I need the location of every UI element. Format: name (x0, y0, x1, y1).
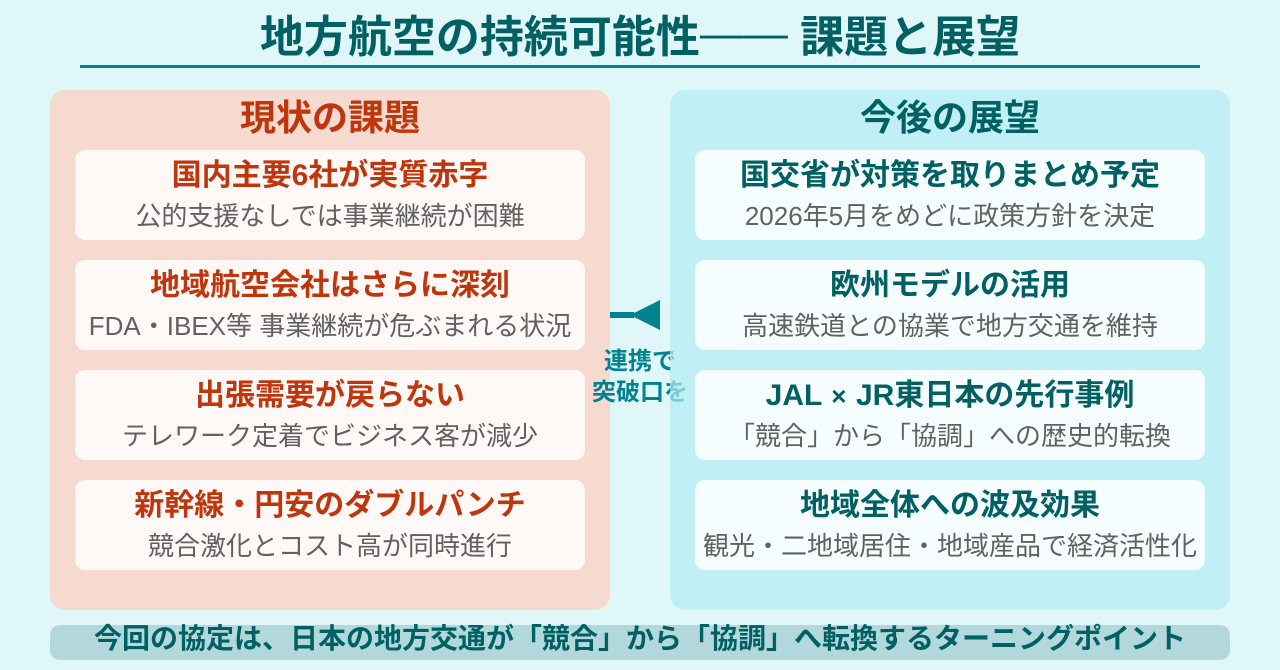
card: outlook 4: 観光・二地域居住・地域産品で経済活性化 (703, 531, 1197, 561)
card: outlook 4 (695, 480, 1205, 570)
panel: current issues background (50, 90, 610, 610)
heading: current issues: 現状の課題 (240, 97, 420, 138)
card: outlook 2: 欧州モデルの活用 (830, 269, 1070, 302)
card: outlook 4: 地域全体への波及効果 (800, 489, 1100, 522)
card: outlook 1: 2026年5月をめどに政策方針を決定 (745, 201, 1155, 231)
arrow label: 突破口を (592, 379, 688, 406)
card: issue 2: 地域航空会社はさらに深刻 (150, 269, 510, 302)
card: issue 3 (75, 370, 585, 460)
arrow label: 連携で (604, 348, 676, 375)
card: outlook 3 (695, 370, 1205, 460)
footer message: 今回の協定は、日本の地方交通が「競合」から「協調」へ転換するターニングポイント (94, 623, 1186, 654)
card: issue 4: 新幹線・円安のダブルパンチ (134, 489, 526, 522)
card: outlook 2: 高速鉄道との協業で地方交通を維持 (742, 311, 1158, 341)
card: issue 2 (75, 260, 585, 350)
arrow: from outlook to issues (610, 300, 660, 330)
card: outlook 1: 国交省が対策を取りまとめ予定 (740, 159, 1160, 192)
card: outlook 2 (695, 260, 1205, 350)
card: issue 3: 出張需要が戻らない (195, 379, 465, 412)
heading: outlook: 今後の展望 (860, 97, 1040, 138)
card: issue 3: テレワーク定着でビジネス客が減少 (122, 421, 538, 451)
card: issue 1 (75, 150, 585, 240)
card: issue 1: 国内主要6社が実質赤字 (172, 159, 488, 192)
panel: outlook background (670, 90, 1230, 610)
card: outlook 3: JAL × JR東日本の先行事例 (766, 379, 1134, 412)
title: 地方航空の持続可能性—— 課題と展望 (260, 9, 1020, 62)
card: issue 1: 公的支援なしでは事業継続が困難 (135, 201, 525, 231)
arrow label (592, 348, 688, 406)
card: issue 4 (75, 480, 585, 570)
bottom bar (50, 625, 1230, 660)
card: outlook 1 (695, 150, 1205, 240)
card: outlook 3: 「競合」から「協調」への歴史的転換 (729, 421, 1171, 451)
card: issue 4: 競合激化とコスト高が同時進行 (148, 531, 512, 561)
card: issue 2: FDA・IBEX等 事業継続が危ぶまれる状況 (89, 311, 571, 341)
